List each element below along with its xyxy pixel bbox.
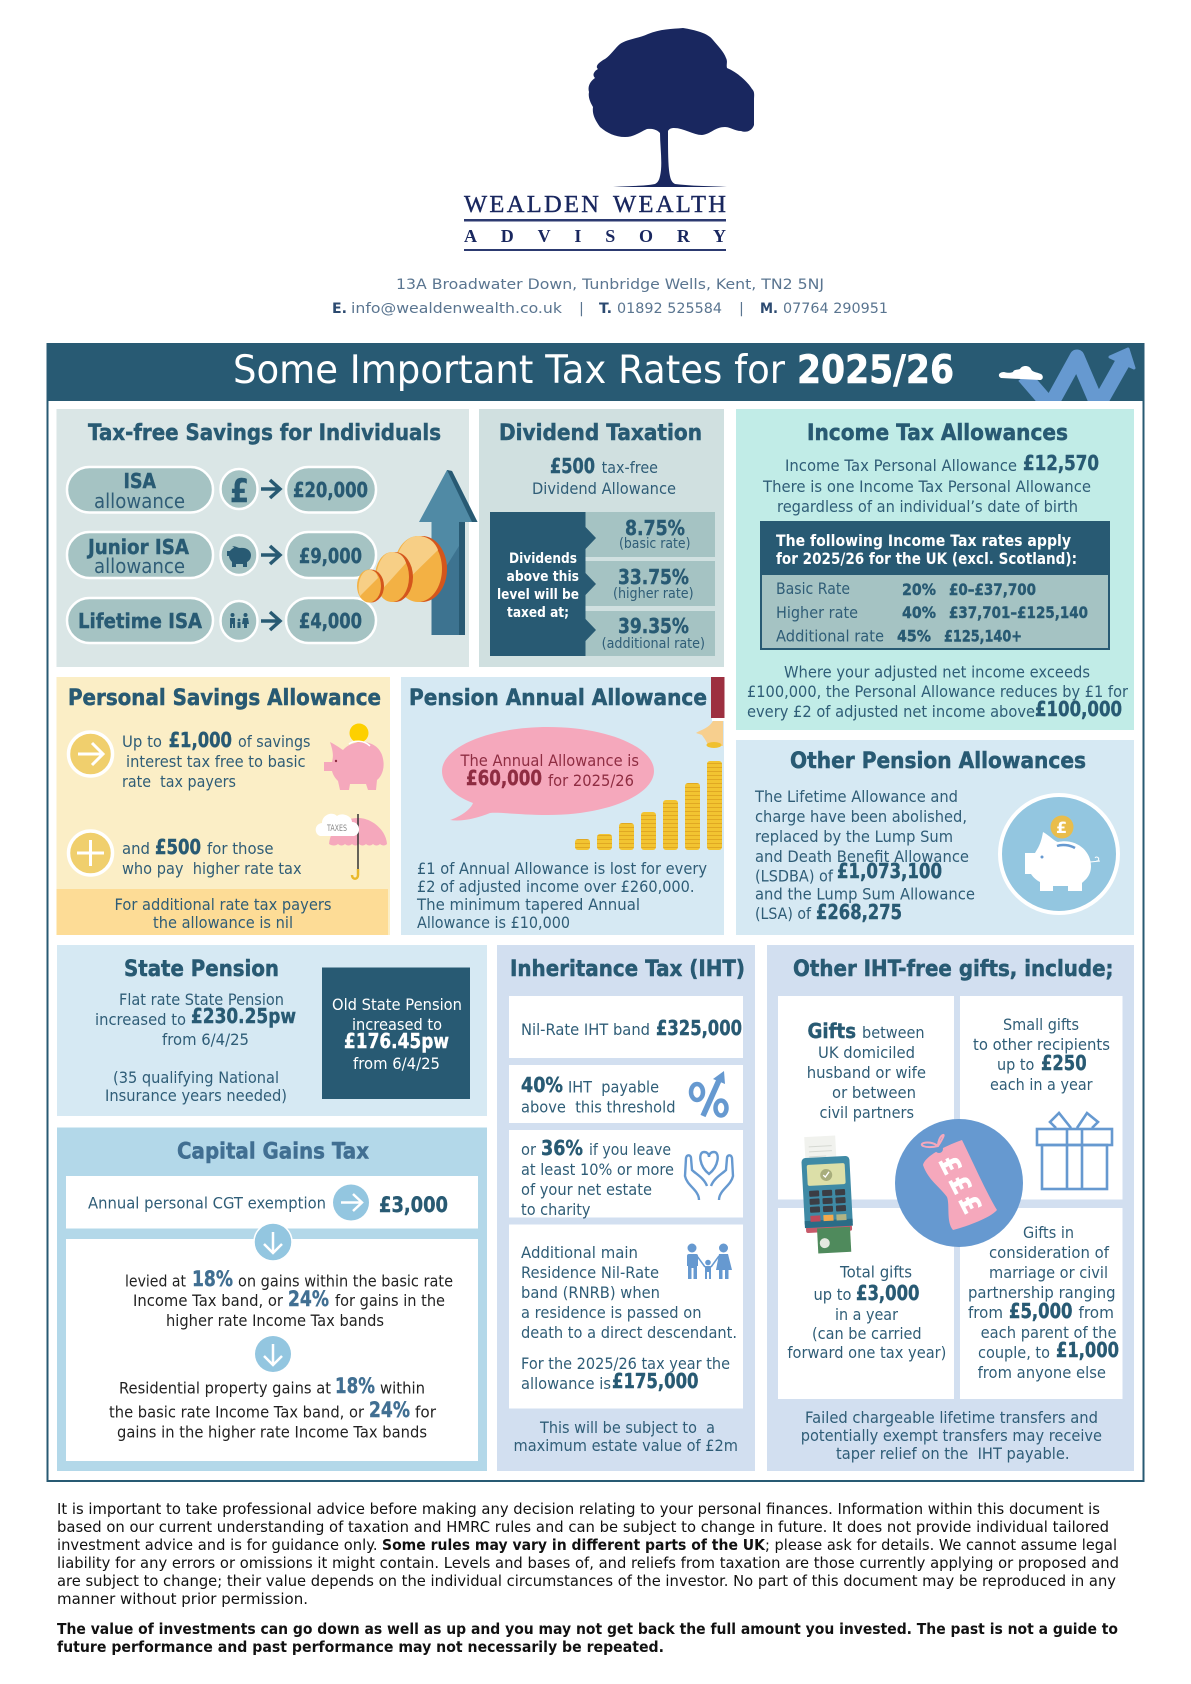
gifts box: marriage: partnership ranging (968, 1283, 1116, 1302)
contact details: | (579, 301, 584, 317)
CGT exemption (66, 1176, 478, 1228)
body text: charge have been abolished, (755, 807, 967, 826)
CGT rates box (66, 1239, 478, 1461)
nil-rate band: £325,000 (656, 1016, 742, 1040)
disclaimer: based on our current understanding of taxation and HMRC rules and can be subject to change in future. It does not provide individual tailored (57, 1518, 1109, 1536)
savings text: rate tax payers (122, 772, 236, 791)
old state pension box: from 6/4/25 (353, 1054, 440, 1073)
old state pension box: increased to (352, 1015, 442, 1034)
icon: gift box (1037, 1113, 1112, 1189)
panel: pension annual allowance (401, 677, 724, 935)
title: 2025/26 (797, 348, 954, 393)
gifts box: total gifts (778, 1208, 954, 1399)
income tax rates table: £37,701–£125,140 (949, 603, 1088, 622)
body text (754, 787, 975, 924)
disclaimer: It is important to take professional advice before making any decision relating to your personal finances. Information within this document is (57, 1500, 1100, 1518)
callout: additional rate: For additional rate tax payers (114, 895, 332, 914)
rate rows: 39.35% (618, 614, 689, 638)
savings text: £1,000 (169, 728, 232, 752)
gifts box: marriage: marriage or civil (989, 1263, 1108, 1282)
residence nil-rate band: band (RNRB) when (521, 1283, 660, 1302)
gifts box: total gifts: Total gifts (839, 1262, 912, 1282)
icon: pink piggy bank (324, 724, 384, 790)
speech bubble (442, 727, 654, 821)
dark label box: Dividends (509, 551, 577, 567)
savings text: interest tax free to basic (126, 752, 306, 771)
dark label box: taxed at; (507, 605, 569, 621)
CGT rates box: 18% (192, 1267, 233, 1291)
ISA row: ISA (124, 469, 156, 493)
contact details: E. (332, 301, 347, 317)
gifts box: total gifts: forward one tax year) (787, 1343, 946, 1362)
ISA row: £20,000 (293, 478, 368, 502)
flat rate text: £230.25pw (191, 1004, 296, 1028)
title: Some Important Tax Rates for (233, 348, 786, 393)
gifts box: marriage: consideration of (989, 1243, 1109, 1262)
gifts box: marriage: £1,000 (1056, 1338, 1119, 1362)
36 percent (509, 1130, 743, 1219)
Junior ISA row: allowance (94, 554, 185, 578)
Junior ISA row: Junior ISA (86, 535, 189, 559)
residence nil-rate band: Residence Nil-Rate (521, 1263, 659, 1282)
Junior ISA row: £9,000 (299, 544, 362, 568)
CGT rates box: on gains within the basic rate (238, 1272, 453, 1290)
estate value note (514, 1418, 738, 1455)
contact details: 07764 290951 (783, 301, 888, 317)
panel: other pension allowances (736, 740, 1134, 935)
panel: capital gains tax (57, 1128, 487, 1471)
estate value note: maximum estate value of £2m (514, 1436, 738, 1455)
CGT rates box: for (415, 1402, 436, 1422)
income tax rates table: 40% (902, 603, 936, 622)
heading: Capital Gains Tax (177, 1140, 369, 1164)
taper relief note: potentially exempt transfers may receive (801, 1426, 1102, 1445)
risk warning: future performance and past performance may not necessarily be repeated. (57, 1638, 664, 1656)
ISA row: allowance (94, 489, 185, 513)
taper text: every £2 of adjusted net income above (747, 702, 1035, 721)
income tax rates table: for 2025/26 for the UK (excl. Scotland): (776, 549, 1077, 568)
CGT exemption: £3,000 (379, 1193, 448, 1217)
dividend allowance: £500 (550, 454, 595, 478)
dark label box: above this (506, 569, 579, 585)
disclaimer: investment advice and is for guidance only. (57, 1536, 378, 1554)
taper text: Where your adjusted net income exceeds (784, 662, 1090, 682)
CGT rates box: 24% (288, 1287, 329, 1311)
residence nil-rate band: death to a direct descendant. (521, 1323, 737, 1342)
higher rate text: £500 (155, 835, 201, 859)
higher rate text: who pay higher rate tax (122, 859, 302, 878)
taper text: £100,000 (1035, 697, 1122, 721)
disclaimer: liability for any errors or omissions it might contain. Levels and bases of, and reliefs from taxation are those currently applying or proposed and (57, 1554, 1119, 1572)
CGT rates box: gains in the higher rate Income Tax bands (117, 1422, 427, 1442)
body text: Allowance is £10,000 (417, 913, 570, 932)
gifts box: spouses: Gifts (808, 1019, 856, 1043)
gifts box: marriage (960, 1208, 1122, 1399)
savings text (122, 728, 310, 791)
gifts box: total gifts: £3,000 (856, 1281, 920, 1305)
CGT rates box: for gains in the (335, 1291, 445, 1310)
residence nil-rate band: allowance is (521, 1374, 611, 1393)
nil-rate band: Nil-Rate IHT band (521, 1020, 650, 1039)
heading: Tax-free Savings for Individuals (88, 421, 441, 446)
CGT rates box: the basic rate Income Tax band, or (109, 1402, 364, 1422)
income tax rates table: £125,140+ (944, 626, 1022, 646)
disclaimer: ; please ask for details. We cannot assume legal (765, 1536, 1117, 1554)
body text: (LSDBA) of (755, 866, 833, 886)
36 percent: 36% (541, 1136, 583, 1160)
body text: £2 of adjusted income over £260,000. (417, 877, 694, 896)
taper relief note (801, 1408, 1102, 1463)
40 percent (509, 1065, 743, 1123)
income tax rates table: 45% (897, 626, 931, 646)
speech bubble: for 2025/26 (548, 771, 634, 790)
36 percent: of your net estate (521, 1180, 652, 1199)
nil-rate band (509, 996, 743, 1058)
36 percent: at least 10% or more (521, 1160, 674, 1179)
CGT rates box: Residential property gains at (119, 1378, 331, 1398)
icon: plus circle (68, 831, 112, 875)
flat rate text: Insurance years needed) (105, 1086, 287, 1105)
dividend allowance (532, 454, 676, 498)
contact details: M. (760, 301, 778, 317)
contact details (332, 277, 888, 317)
panel: personal savings allowance (56, 677, 390, 935)
risk warning (57, 1620, 1118, 1656)
icon: price tag circle (895, 1119, 1023, 1247)
gifts box: marriage: from anyone else (978, 1363, 1106, 1382)
icon: coins (357, 536, 447, 602)
Lifetime ISA row (67, 598, 376, 643)
gifts box: small gifts: each in a year (990, 1075, 1093, 1094)
logo wordmark (464, 191, 726, 218)
logo wordmark: WEALTH (613, 191, 726, 218)
gifts box: marriage: from (1078, 1303, 1114, 1322)
higher rate text: for those (207, 839, 274, 858)
gifts box: marriage: Gifts in (1023, 1223, 1074, 1242)
income tax rates table: Higher rate (776, 603, 858, 622)
CGT rates box: levied at (125, 1272, 186, 1290)
gifts box: total gifts: (can be carried (812, 1324, 922, 1343)
gifts box: small gifts: Small gifts (1003, 1015, 1079, 1034)
logo tagline: ADVISORY (464, 226, 726, 246)
heading: Inheritance Tax (IHT) (510, 957, 745, 982)
icon: down arrow 2 (255, 1336, 291, 1372)
residence nil-rate band: £175,000 (612, 1369, 698, 1393)
gifts box: marriage: couple, to (978, 1343, 1050, 1362)
residence nil-rate band: a residence is passed on (521, 1303, 702, 1322)
contact details: 13A Broadwater Down, Tunbridge Wells, Kent, TN2 5NJ (396, 277, 824, 293)
gifts box: spouses: husband or wife (807, 1063, 926, 1082)
higher rate text (122, 835, 302, 878)
rate rows: 8.75% (625, 516, 685, 540)
40 percent: 40% (521, 1073, 563, 1097)
gifts box: spouses (778, 996, 954, 1200)
Lifetime ISA row: Lifetime ISA (78, 609, 202, 633)
income tax rates table: The following Income Tax rates apply (776, 531, 1072, 550)
contact details: 01892 525584 (617, 301, 722, 317)
rate rows: (higher rate) (613, 586, 694, 602)
heading: Dividend Taxation (499, 421, 702, 446)
36 percent: to charity (521, 1200, 590, 1219)
icon: zigzag growth arrow (1024, 349, 1134, 406)
panel: inheritance tax (497, 945, 755, 1471)
residence nil-rate band: Additional main (521, 1243, 638, 1262)
CGT rates box: 24% (369, 1398, 410, 1422)
icon: piggy bank circle (1000, 795, 1118, 913)
contact details: T. (599, 301, 612, 317)
gifts box: small gifts: to other recipients (973, 1035, 1110, 1054)
Lifetime ISA row: £4,000 (299, 609, 362, 633)
Junior ISA row (67, 532, 376, 578)
disclaimer: are subject to change; their value depends on the individual circumstances of the investor. No part of this document may be reproduced in any (57, 1572, 1116, 1590)
gifts box: marriage: £5,000 (1009, 1299, 1072, 1323)
CGT rates box: within (380, 1378, 425, 1398)
income tax rates table: Basic Rate (776, 579, 850, 598)
icon: percent (691, 1071, 726, 1116)
40 percent: IHT payable (568, 1078, 659, 1096)
income tax rates table: 20% (902, 580, 936, 599)
body text: The Lifetime Allowance and (754, 787, 958, 806)
icon: umbrella: TAXES (326, 824, 347, 834)
icon: hands and heart (685, 1152, 733, 1200)
heading: Income Tax Allowances (807, 421, 1068, 446)
callout: additional rate: the allowance is nil (153, 913, 293, 932)
icon: tree (589, 28, 754, 187)
old state pension box: £176.45pw (344, 1029, 449, 1053)
dividend allowance: Dividend Allowance (532, 479, 676, 498)
rate rows: 33.75% (618, 565, 689, 589)
panel: income tax allowances (736, 409, 1134, 730)
gifts box: small gifts: up to (997, 1055, 1034, 1074)
icon: price tag circle: £££ (932, 1151, 987, 1219)
CGT rates box: Income Tax band, or (133, 1291, 283, 1310)
flat rate text: from 6/4/25 (162, 1030, 249, 1049)
taper relief note: Failed chargeable lifetime transfers and (805, 1408, 1098, 1427)
gifts box: total gifts: in a year (835, 1305, 898, 1324)
disclaimer: manner without prior permission. (57, 1590, 308, 1608)
panel: tax-free savings (56, 409, 478, 667)
36 percent: or (521, 1140, 536, 1159)
body text (416, 859, 707, 932)
heading: Personal Savings Allowance (68, 686, 381, 711)
dark label box: level will be (497, 587, 579, 603)
gifts box: spouses: or between (832, 1083, 916, 1102)
callout: additional rate (56, 889, 388, 935)
heading: Pension Annual Allowance (409, 686, 707, 711)
ISA row: £ (230, 472, 249, 510)
income tax rates table: £0–£37,700 (949, 580, 1036, 599)
CGT rates box: higher rate Income Tax bands (166, 1311, 384, 1330)
logo: Wealden Wealth Advisory (464, 28, 754, 251)
gifts box: small gifts (960, 996, 1122, 1200)
icon: down arrow 1 (254, 1223, 292, 1261)
gifts box: total gifts: up to (814, 1285, 852, 1304)
panel: other IHT-free gifts (767, 945, 1134, 1471)
gifts box: spouses: civil partners (820, 1103, 914, 1122)
old state pension box: Old State Pension (332, 995, 462, 1014)
body text: replaced by the Lump Sum (755, 827, 953, 846)
ISA row (67, 467, 376, 513)
flat rate text (95, 990, 296, 1105)
gifts box: marriage: from (968, 1303, 1003, 1322)
panel: dividend taxation (479, 409, 724, 667)
title banner (47, 344, 1144, 406)
body text: £268,275 (816, 900, 902, 924)
disclaimer (57, 1500, 1119, 1608)
taper text: £100,000, the Personal Allowance reduces by £1 for (747, 682, 1128, 701)
personal allowance text (762, 451, 1099, 516)
higher rate text: and (122, 839, 150, 858)
gifts box: small gifts: £250 (1041, 1051, 1087, 1075)
personal allowance text: There is one Income Tax Personal Allowance (762, 477, 1091, 496)
body text: and the Lump Sum Allowance (755, 884, 975, 904)
taper text (747, 662, 1128, 721)
old state pension box (322, 968, 470, 1099)
personal allowance text: regardless of an individual’s date of birth (777, 497, 1078, 516)
taper relief note: taper relief on the IHT payable. (836, 1444, 1070, 1463)
36 percent: if you leave (589, 1140, 671, 1159)
estate value note: This will be subject to a (539, 1418, 715, 1437)
rate rows: (basic rate) (619, 536, 690, 552)
body text: £1 of Annual Allowance is lost for every (417, 859, 707, 878)
body text: (LSA) of (755, 904, 811, 923)
flat rate text: Flat rate State Pension (119, 990, 284, 1009)
heading: Other IHT-free gifts, include; (793, 957, 1114, 982)
gifts box: marriage: each parent of the (981, 1323, 1116, 1342)
icon: umbrella (316, 814, 387, 879)
gifts box: spouses: UK domiciled (818, 1043, 915, 1062)
body text: £1,073,100 (837, 859, 942, 883)
icon: up arrow (419, 470, 478, 635)
heading: State Pension (124, 957, 279, 982)
CGT rates box: 18% (335, 1374, 375, 1398)
residence nil-rate band (509, 1224, 743, 1408)
savings text: Up to (122, 732, 162, 751)
panel: state pension (57, 945, 487, 1116)
savings text: of savings (238, 732, 310, 751)
risk warning: The value of investments can go down as well as up and you may not get back the full amount you invested. The past is not a guide to (57, 1620, 1118, 1638)
income tax rates table (760, 521, 1110, 649)
personal allowance text: £12,570 (1023, 451, 1099, 475)
icon: card terminal (800, 1135, 854, 1254)
contact details: | (739, 301, 744, 317)
speech bubble: £60,000 (466, 766, 542, 790)
icon: hand dropping coin (696, 677, 724, 748)
dividend allowance: tax-free (602, 458, 658, 477)
body text: and Death Benefit Allowance (755, 847, 969, 866)
heading: Other Pension Allowances (790, 749, 1086, 774)
icon: family (687, 1244, 732, 1279)
icon: cloud (999, 366, 1043, 380)
speech bubble: The Annual Allowance is (460, 751, 639, 770)
dark label box (490, 512, 596, 656)
contact details: info@wealdenwealth.co.uk (351, 301, 563, 317)
flat rate text: (35 qualifying National (113, 1068, 279, 1087)
rate rows (585, 512, 715, 656)
icon: piggy bank circle: £ (1056, 818, 1067, 837)
disclaimer: Some rules may vary in different parts of the UK (382, 1536, 766, 1554)
main frame (48, 344, 1144, 1481)
residence nil-rate band: For the 2025/26 tax year the (521, 1354, 730, 1373)
flat rate text: increased to (95, 1010, 186, 1029)
gifts box: spouses: between (862, 1023, 925, 1042)
40 percent: above this threshold (521, 1098, 676, 1116)
income tax rates table: Additional rate (776, 626, 884, 646)
icon: arrow circle (68, 732, 112, 776)
chart: coin stacks (575, 761, 722, 850)
personal allowance text: Income Tax Personal Allowance (785, 456, 1017, 475)
body text: The minimum tapered Annual (416, 895, 640, 914)
rate rows: (additional rate) (602, 636, 705, 652)
CGT exemption: Annual personal CGT exemption (88, 1194, 326, 1212)
logo wordmark: WEALDEN (464, 191, 599, 218)
